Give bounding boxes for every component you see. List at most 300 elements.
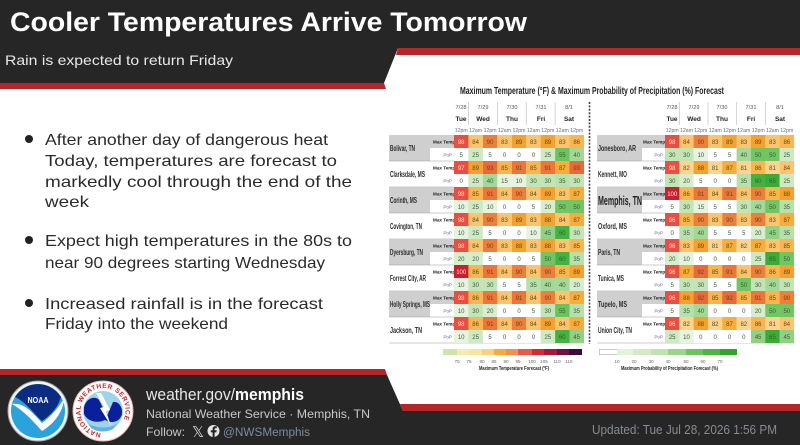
- row: Kennett, MO: 65: [769, 179, 776, 185]
- row: Memphis, TN: 85: [769, 192, 776, 198]
- row: Covington, TN: 90: [487, 218, 494, 224]
- row: Jackson, TN: 0: [517, 335, 521, 341]
- row: Jonesboro, AR: 25: [783, 153, 791, 159]
- row: Paris, TN: 10: [683, 257, 690, 263]
- row: Holly Springs, MS: 35: [573, 309, 581, 315]
- row: Forrest City, AR: 5: [503, 283, 507, 289]
- left date header: 12am: [498, 128, 511, 134]
- left date header: 12am: [469, 128, 482, 134]
- row: Bolivar, TN: Max Temp: [433, 140, 455, 144]
- row: Holly Springs, MS: 84: [530, 296, 537, 302]
- row: Dyersburg, TN: 98: [458, 244, 465, 250]
- row: Tupelo, MS: PoP: [654, 308, 663, 314]
- row: Jackson, TN: [389, 317, 584, 343]
- row: Kennett, MO: 5: [699, 179, 703, 185]
- row: Clarksdale, MS: 97: [458, 166, 465, 172]
- row: Kennett, MO: 60: [755, 179, 762, 185]
- row: Memphis, TN: Max Temp: [643, 192, 665, 196]
- row: Tunica, MS: 90: [755, 270, 762, 276]
- row: Corinth, MS: 50: [559, 205, 566, 211]
- row: Kennett, MO: 30: [669, 179, 676, 185]
- row: Dyersburg, TN: 83: [530, 244, 537, 250]
- row: Dyersburg, TN: 83: [559, 244, 566, 250]
- row: Clarksdale, MS: [389, 161, 584, 187]
- row: Holly Springs, MS: 20: [487, 309, 494, 315]
- right date header: 12pm: [694, 128, 707, 134]
- row: Holly Springs, MS: 91: [516, 296, 523, 302]
- row: Bolivar, TN: 0: [517, 153, 521, 159]
- row: Dyersburg, TN: Dyersburg, TN: [390, 248, 423, 257]
- right date header: Wed: [687, 116, 701, 123]
- row: Oxford, MS: 35: [683, 231, 690, 237]
- row: Forrest City, AR: 90: [544, 270, 552, 276]
- row: Union City, TN: 25: [669, 335, 676, 341]
- row: Memphis, TN: 86: [683, 192, 690, 198]
- row: Corinth, MS: 84: [530, 192, 537, 198]
- left date header: 8/1: [565, 105, 573, 111]
- icon: NOAA logo: NOAA: [28, 396, 49, 405]
- row: Tunica, MS: 92: [697, 270, 705, 276]
- row: Tupelo, MS: 0: [714, 309, 718, 315]
- row: Union City, TN: [597, 317, 794, 343]
- left date header: 12am: [527, 128, 540, 134]
- row: Corinth, MS: Corinth, MS: [390, 196, 417, 205]
- row: Holly Springs, MS: 84: [501, 296, 508, 302]
- row: Corinth, MS: 10: [487, 205, 494, 211]
- row: Covington, TN: 45: [544, 231, 552, 237]
- row: Memphis, TN: PoP: [654, 204, 663, 210]
- footer social row: [146, 424, 310, 441]
- row: Corinth, MS: 25: [472, 205, 480, 211]
- row: Oxford, MS: 40: [697, 231, 705, 237]
- row: Dyersburg, TN: 88: [544, 244, 552, 250]
- row: Oxford, MS: 0: [671, 231, 675, 237]
- legend: precipitation probability: 30: [648, 359, 654, 364]
- row: Tunica, MS: 96: [669, 270, 676, 276]
- row: Dyersburg, TN: 88: [516, 244, 523, 250]
- row: Jackson, TN: 89: [544, 322, 552, 328]
- row: Union City, TN: 45: [783, 335, 791, 341]
- table divider: [588, 102, 590, 344]
- row: Covington, TN: Max Temp: [433, 218, 455, 222]
- right date header: 7/30: [717, 105, 727, 111]
- row: Tupelo, MS: 20: [755, 309, 762, 315]
- row: Corinth, MS: 89: [544, 192, 552, 198]
- row: Covington, TN: 25: [472, 231, 480, 237]
- row: Covington, TN: 30: [573, 231, 581, 237]
- legend: maximum temperature: 95: [515, 359, 521, 364]
- row: Tunica, MS: 89: [783, 270, 791, 276]
- right date header: 7/29: [689, 105, 699, 111]
- row: Holly Springs, MS: 87: [573, 296, 581, 302]
- row: Tupelo, MS: 88: [683, 296, 690, 302]
- left date header: Sat: [564, 116, 575, 123]
- row: Covington, TN: PoP: [443, 230, 452, 236]
- row: Tunica, MS: 84: [740, 270, 748, 276]
- row: Jackson, TN: 84: [559, 322, 566, 328]
- legend: precipitation probability: Maximum Probability of Precipitation Forecast (%): [621, 366, 718, 372]
- row: Bolivar, TN: 5: [460, 153, 464, 159]
- row: Bolivar, TN: 0: [532, 153, 536, 159]
- row: Jackson, TN: 84: [530, 322, 537, 328]
- row: Forrest City, AR: 40: [559, 283, 566, 289]
- row: Jonesboro, AR: 30: [683, 153, 690, 159]
- row: Paris, TN: Max Temp: [643, 244, 665, 248]
- row: Clarksdale, MS: 40: [487, 179, 494, 185]
- row: Forrest City, AR: 89: [573, 270, 581, 276]
- legend: maximum temperature: 110: [553, 359, 561, 364]
- row: Kennett, MO: 81: [740, 166, 748, 172]
- row: Holly Springs, MS: 91: [487, 296, 494, 302]
- row: Tupelo, MS: 50: [783, 309, 791, 315]
- row: Kennett, MO: 0: [728, 179, 732, 185]
- row: Forrest City, AR: 100: [456, 270, 467, 276]
- row: Clarksdale, MS: 0: [460, 179, 464, 185]
- row: Memphis, TN: 15: [697, 205, 705, 211]
- legend: maximum temperature: [443, 349, 582, 372]
- row: Dyersburg, TN: 5: [488, 257, 492, 263]
- right date header: Thu: [716, 116, 728, 123]
- row: Bolivar, TN: 98: [458, 140, 465, 146]
- row: Jackson, TN: 10: [458, 335, 465, 341]
- row: Dyersburg, TN: 60: [559, 257, 566, 263]
- row: Memphis, TN: Memphis, TN: [598, 193, 642, 208]
- row: Oxford, MS: PoP: [654, 230, 663, 236]
- row: Union City, TN: Union City, TN: [598, 326, 632, 335]
- left date header: Thu: [506, 116, 518, 123]
- row: Jackson, TN: 0: [532, 335, 536, 341]
- legend: maximum temperature: Maximum Temperature Forecast (°F): [479, 366, 549, 372]
- left date header: [455, 102, 583, 134]
- row: Paris, TN: 0: [728, 257, 732, 263]
- right date header: 8/1: [776, 105, 784, 111]
- row: Dyersburg, TN: 90: [487, 244, 494, 250]
- row: Union City, TN: 96: [669, 322, 676, 328]
- row: Dyersburg, TN: 0: [503, 257, 507, 263]
- row: Kennett, MO: 35: [740, 179, 748, 185]
- row: Corinth, MS: Max Temp: [433, 192, 455, 196]
- row: Kennett, MO: 82: [683, 166, 690, 172]
- row: Oxford, MS: 85: [683, 218, 690, 224]
- right date header: [666, 102, 793, 134]
- row: Tupelo, MS: 90: [783, 296, 791, 302]
- row: Tunica, MS: Tunica, MS: [598, 274, 624, 283]
- left date header: Fri: [537, 116, 545, 123]
- row: Paris, TN: 83: [769, 244, 776, 250]
- row: Memphis, TN: 84: [740, 192, 748, 198]
- right date header: 7/28: [667, 105, 677, 111]
- updated timestamp: Updated: Tue Jul 28, 2026 1:56 PM: [592, 423, 777, 437]
- icon: Facebook: [208, 425, 220, 437]
- row: Jonesboro, AR: 5: [728, 153, 732, 159]
- row: Forrest City, AR: PoP: [443, 282, 452, 288]
- row: Tunica, MS: 30: [755, 283, 762, 289]
- row: Paris, TN: 0: [714, 257, 718, 263]
- row: Bolivar, TN: 55: [559, 153, 566, 159]
- legend: maximum temperature: 85: [491, 359, 497, 364]
- right date header: 12am: [737, 128, 750, 134]
- left date header: 12pm: [455, 128, 468, 134]
- row: Tupelo, MS: 85: [712, 296, 719, 302]
- row: Holly Springs, MS: PoP: [443, 308, 452, 314]
- row: Paris, TN: 0: [742, 257, 746, 263]
- row: Holly Springs, MS: Max Temp: [433, 296, 455, 300]
- row: Jonesboro, AR: Max Temp: [643, 140, 665, 144]
- right date header: 12am: [709, 128, 722, 134]
- right date header: 7/31: [746, 105, 756, 111]
- row: Jackson, TN: 25: [544, 335, 552, 341]
- icon: X: 𝕏: [192, 424, 204, 441]
- left date header: 12pm: [513, 128, 525, 134]
- row: Paris, TN: 82: [740, 244, 748, 250]
- row: Corinth, MS: 87: [573, 192, 581, 198]
- row: Dyersburg, TN: [389, 239, 584, 265]
- row: Forrest City, AR: 40: [544, 283, 552, 289]
- row: Corinth, MS: [389, 187, 584, 213]
- row: Covington, TN: 83: [530, 218, 537, 224]
- row: Paris, TN: Paris, TN: [598, 248, 620, 257]
- left date header: 7/29: [478, 105, 488, 111]
- bullet list: [25, 132, 352, 333]
- row: Union City, TN: Max Temp: [643, 322, 665, 326]
- footer office name: National Weather Service · Memphis, TN: [146, 407, 370, 421]
- row: Holly Springs, MS: 86: [472, 296, 480, 302]
- row: Oxford, MS: 5: [742, 231, 746, 237]
- row: Memphis, TN: [597, 187, 794, 213]
- row: Corinth, MS: 98: [458, 192, 465, 198]
- row: Holly Springs, MS: 30: [544, 309, 552, 315]
- footer banner: [0, 369, 800, 445]
- row: Jonesboro, AR: 89: [755, 140, 762, 146]
- row: Memphis, TN: 30: [740, 205, 748, 211]
- row: Union City, TN: 82: [683, 322, 690, 328]
- row: Covington, TN: 83: [501, 218, 508, 224]
- row: Jackson, TN: 90: [516, 322, 523, 328]
- row: Clarksdale, MS: Clarksdale, MS: [390, 170, 425, 179]
- row: Covington, TN: 60: [559, 231, 566, 237]
- left date header: 12pm: [484, 128, 497, 134]
- row: Memphis, TN: 35: [783, 205, 791, 211]
- row: Jonesboro, AR: 50: [769, 153, 776, 159]
- row: Memphis, TN: 91: [726, 192, 733, 198]
- row: Jonesboro, AR: 89: [726, 140, 733, 146]
- row: Covington, TN: 98: [458, 218, 465, 224]
- row: Clarksdale, MS: 30: [544, 179, 552, 185]
- row: Jackson, TN: 91: [487, 322, 494, 328]
- bullet 1: After another day of dangerous heat: [45, 132, 329, 149]
- row: Oxford, MS: 90: [726, 218, 733, 224]
- row: Forrest City, AR: [389, 265, 584, 291]
- row: Tupelo, MS: 50: [769, 309, 776, 315]
- row: Oxford, MS: 90: [697, 218, 705, 224]
- legend: precipitation probability: 20: [631, 359, 637, 364]
- row: Tunica, MS: 40: [769, 283, 776, 289]
- row: Forrest City, AR: Max Temp: [433, 270, 455, 274]
- row: Tupelo, MS: 96: [669, 296, 676, 302]
- row: Kennett, MO: 84: [783, 166, 791, 172]
- row: Forrest City, AR: 86: [472, 270, 480, 276]
- row: Kennett, MO: 86: [755, 166, 762, 172]
- row: Covington, TN: 5: [488, 231, 492, 237]
- row: Jackson, TN: Max Temp: [433, 322, 455, 326]
- right date header: 12am: [766, 128, 779, 134]
- row: Jonesboro, AR: 50: [755, 153, 762, 159]
- row: Dyersburg, TN: Max Temp: [433, 244, 455, 248]
- bullet 1: markedly cool through the end of the: [45, 174, 352, 191]
- row: Dyersburg, TN: PoP: [443, 256, 452, 262]
- row: Paris, TN: 50: [783, 257, 791, 263]
- bullet 3: [25, 296, 324, 333]
- row: Paris, TN: 96: [669, 244, 676, 250]
- row: Jonesboro, AR: 86: [783, 140, 791, 146]
- row: Union City, TN: 86: [755, 322, 762, 328]
- row: Kennett, MO: Max Temp: [643, 166, 665, 170]
- row: Holly Springs, MS: [389, 291, 584, 317]
- row: Holly Springs, MS: 30: [472, 309, 480, 315]
- legend: maximum temperature: 100: [528, 359, 536, 364]
- left date header: 12am: [556, 128, 569, 134]
- legend: maximum temperature: 115: [565, 359, 573, 364]
- row: Oxford, MS: Max Temp: [643, 218, 665, 222]
- row: Kennett, MO: 81: [712, 166, 719, 172]
- row: Kennett, MO: PoP: [654, 178, 663, 184]
- row: Tunica, MS: 85: [712, 270, 719, 276]
- bullet 2: [25, 233, 352, 272]
- right date header: 12pm: [752, 128, 765, 134]
- legend: precipitation probability: 60: [700, 359, 706, 364]
- row: Corinth, MS: 10: [458, 205, 465, 211]
- row: Oxford, MS: 20: [755, 231, 762, 237]
- bullet 2: Expect high temperatures in the 80s to: [45, 233, 352, 250]
- row: Kennett, MO: 20: [683, 179, 690, 185]
- row: Jonesboro, AR: 30: [669, 153, 676, 159]
- table: right column: [597, 102, 794, 343]
- row: Tupelo, MS: Max Temp: [643, 296, 665, 300]
- row: Tunica, MS: Max Temp: [643, 270, 665, 274]
- row: Jackson, TN: 87: [573, 322, 581, 328]
- row: Tunica, MS: [597, 265, 794, 291]
- row: Oxford, MS: 90: [755, 218, 762, 224]
- row: Clarksdale, MS: 35: [559, 179, 566, 185]
- row: Covington, TN: 0: [517, 231, 521, 237]
- row: Bolivar, TN: [389, 135, 584, 161]
- row: Tunica, MS: 30: [783, 283, 791, 289]
- row: Dyersburg, TN: 5: [532, 257, 536, 263]
- row: Memphis, TN: 91: [697, 192, 705, 198]
- row: Union City, TN: 0: [699, 335, 703, 341]
- row: Paris, TN: 0: [699, 257, 703, 263]
- row: Union City, TN: 82: [712, 322, 719, 328]
- bullet 1: Today, temperatures are forecast to: [45, 153, 337, 170]
- row: Oxford, MS: 96: [669, 218, 676, 224]
- bullet 1: week: [44, 194, 90, 211]
- row: Clarksdale, MS: 87: [559, 166, 566, 172]
- row: Clarksdale, MS: 25: [472, 179, 480, 185]
- row: Dyersburg, TN: 84: [472, 244, 480, 250]
- row: Jackson, TN: Jackson, TN: [390, 326, 422, 335]
- legend: maximum temperature: 80: [479, 359, 485, 364]
- row: Kennett, MO: 87: [726, 166, 733, 172]
- row: Paris, TN: 85: [783, 244, 791, 250]
- row: Oxford, MS: 5: [714, 231, 718, 237]
- row: Bolivar, TN: PoP: [443, 152, 452, 158]
- row: Tunica, MS: 5: [728, 283, 732, 289]
- row: Clarksdale, MS: Max Temp: [433, 166, 455, 170]
- row: Clarksdale, MS: 91: [516, 166, 523, 172]
- row: Oxford, MS: Oxford, MS: [598, 222, 627, 231]
- row: Jackson, TN: 98: [458, 322, 465, 328]
- row: Forrest City, AR: 30: [487, 283, 494, 289]
- row: Dyersburg, TN: 20: [472, 257, 480, 263]
- row: Tunica, MS: 86: [769, 270, 776, 276]
- row: Clarksdale, MS: 93: [487, 166, 494, 172]
- row: Paris, TN: 87: [726, 244, 733, 250]
- row: Bolivar, TN: 40: [573, 153, 581, 159]
- row: Clarksdale, MS: 93: [573, 166, 581, 172]
- row: Clarksdale, MS: 91: [544, 166, 552, 172]
- row: Corinth, MS: 0: [503, 205, 507, 211]
- row: Holly Springs, MS: 90: [544, 296, 552, 302]
- row: Tupelo, MS: Tupelo, MS: [598, 300, 627, 309]
- row: Bolivar, TN: 25: [472, 153, 480, 159]
- row: Jonesboro, AR: 90: [697, 140, 705, 146]
- row: Tunica, MS: 50: [740, 283, 748, 289]
- right date header: Fri: [747, 116, 755, 123]
- row: Jonesboro, AR: 40: [740, 153, 748, 159]
- right date header: 12pm: [723, 128, 736, 134]
- row: Jackson, TN: 0: [503, 335, 507, 341]
- row: Forrest City, AR: 5: [517, 283, 521, 289]
- row: Clarksdale, MS: 30: [573, 179, 581, 185]
- row: Tupelo, MS: 85: [740, 296, 748, 302]
- row: Jackson, TN: 25: [472, 335, 480, 341]
- right date header: Tue: [666, 116, 678, 123]
- row: Memphis, TN: 88: [783, 192, 791, 198]
- row: Tunica, MS: 30: [697, 283, 705, 289]
- icon: National Weather Service logo: NATIONAL WEATHER SERVICE: [76, 383, 130, 438]
- row: Holly Springs, MS: 5: [532, 309, 536, 315]
- row: Paris, TN: 20: [669, 257, 676, 263]
- row: Memphis, TN: 50: [769, 205, 776, 211]
- row: Holly Springs, MS: 98: [458, 296, 465, 302]
- row: Clarksdale, MS: 89: [472, 166, 480, 172]
- row: Union City, TN: 0: [728, 335, 732, 341]
- row: Memphis, TN: 90: [755, 192, 762, 198]
- row: Union City, TN: 45: [755, 335, 762, 341]
- row: Dyersburg, TN: 0: [517, 257, 521, 263]
- row: Clarksdale, MS: 10: [516, 179, 523, 185]
- row: Clarksdale, MS: PoP: [443, 178, 452, 184]
- row: Jackson, TN: 84: [501, 322, 508, 328]
- footer social row: Follow:: [146, 425, 185, 439]
- row: Paris, TN: PoP: [654, 256, 663, 262]
- title: Cooler Temperatures Arrive Tomorrow: [10, 7, 528, 37]
- right date header: 12am: [680, 128, 693, 134]
- row: Kennett, MO: 25: [783, 179, 791, 185]
- row: Jackson, TN: 86: [472, 322, 480, 328]
- row: Memphis, TN: 100: [667, 192, 678, 198]
- row: Jackson, TN: 5: [488, 335, 492, 341]
- row: Jackson, TN: 45: [573, 335, 581, 341]
- row: Holly Springs, MS: 10: [458, 309, 465, 315]
- row: Jonesboro, AR: 10: [697, 153, 705, 159]
- row: Tunica, MS: 5: [671, 283, 675, 289]
- row: Holly Springs, MS: 0: [503, 309, 507, 315]
- row: Dyersburg, TN: 50: [544, 257, 552, 263]
- row: Tupelo, MS: 0: [742, 309, 746, 315]
- right date header: 12pm: [666, 128, 679, 134]
- row: Oxford, MS: 5: [728, 231, 732, 237]
